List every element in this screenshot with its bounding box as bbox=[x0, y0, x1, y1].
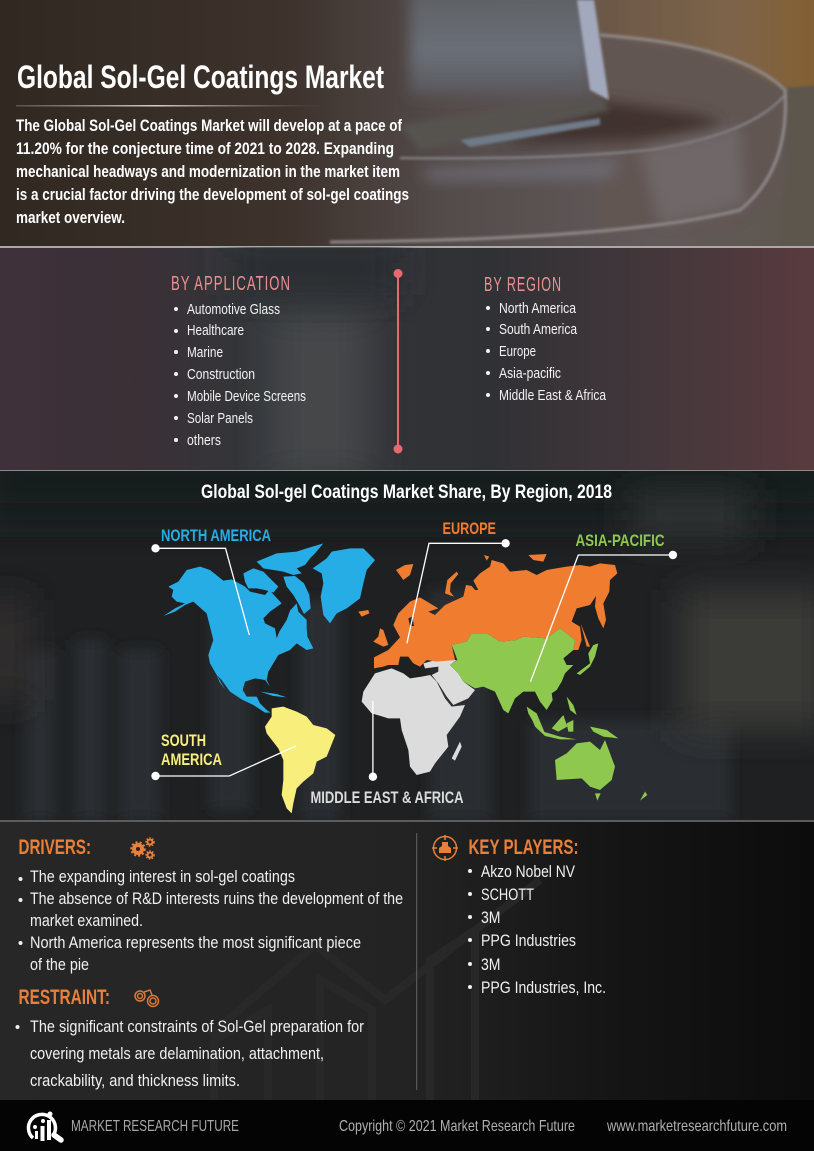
text block: intro paragraph: mechanical headways and modernization in the market item bbox=[16, 162, 400, 181]
list: key players: Akzo Nobel NV bbox=[481, 862, 576, 881]
list: key players: 3M bbox=[481, 955, 500, 974]
label: south america: AMERICA bbox=[161, 750, 222, 769]
list: applications: Healthcare bbox=[187, 322, 244, 339]
icon: key players target bbox=[432, 835, 458, 861]
list: regions: South America bbox=[499, 321, 578, 338]
list: applications: Solar Panels bbox=[187, 410, 253, 427]
text block: intro paragraph: market overview. bbox=[16, 208, 125, 227]
text block: intro paragraph: The Global Sol-Gel Coatings Market will develop at a pace of bbox=[16, 116, 402, 135]
list: key players: 3M bbox=[481, 908, 500, 927]
list: restraint: The significant constraints of Sol-Gel preparation for bbox=[30, 1017, 364, 1036]
panel: header photo background bbox=[0, 0, 814, 250]
label: north america: NORTH AMERICA bbox=[161, 526, 271, 545]
title: Global Sol-Gel Coatings Market bbox=[17, 59, 384, 95]
list: restraint bbox=[16, 1017, 364, 1090]
heading: by application: BY APPLICATION bbox=[171, 273, 291, 295]
list: regions: Asia-pacific bbox=[499, 365, 561, 382]
list: drivers: North America represents the most significant piece bbox=[30, 933, 361, 952]
list: regions: North America bbox=[499, 300, 577, 317]
region: middle east and africa bbox=[362, 660, 475, 775]
list: drivers bbox=[18, 867, 403, 974]
panel: drivers, restraint and key players bbox=[0, 822, 605, 1100]
list: key players bbox=[468, 862, 606, 997]
icon: market research future logo bbox=[28, 1112, 61, 1141]
label: south america bbox=[161, 731, 222, 769]
list: applications: Marine bbox=[187, 344, 223, 361]
region: south america bbox=[265, 707, 335, 813]
panel: map background bbox=[0, 440, 814, 820]
list: drivers: market examined. bbox=[30, 911, 143, 930]
leader lines and dots bbox=[151, 539, 677, 781]
list: applications: Construction bbox=[187, 366, 255, 383]
list: drivers: of the pie bbox=[30, 955, 89, 974]
region: north america bbox=[163, 543, 375, 713]
icon: handcuffs bbox=[135, 990, 158, 1006]
region: europe and russia bbox=[373, 554, 617, 668]
list: drivers: The absence of R&D interests ruins the development of the bbox=[30, 889, 403, 908]
footer copyright: Copyright © 2021 Market Research Future bbox=[339, 1118, 575, 1135]
label: europe: EUROPE bbox=[442, 519, 496, 538]
list: applications: Mobile Device Screens bbox=[187, 388, 306, 405]
label: middle east and africa: MIDDLE EAST & AFRICA bbox=[310, 788, 464, 807]
text block: intro paragraph bbox=[16, 116, 409, 227]
divider with end dots bbox=[394, 269, 402, 454]
regions: americas bbox=[163, 543, 375, 813]
region: asia-pacific bbox=[450, 628, 647, 801]
heading: drivers: DRIVERS: bbox=[18, 836, 91, 859]
text block: intro paragraph: 11.20% for the conjecture time of 2021 to 2028. Expanding bbox=[16, 139, 394, 158]
chart title: Global Sol-gel Coatings Market Share, By Region, 2018 bbox=[201, 482, 612, 503]
label: south america: SOUTH bbox=[161, 731, 206, 750]
panel: segmentation bbox=[0, 240, 814, 480]
list: restraint: crackability, and thickness limits. bbox=[30, 1071, 240, 1090]
panel: footer bbox=[0, 1100, 814, 1151]
list: key players: PPG Industries bbox=[481, 931, 576, 950]
text block: intro paragraph: is a crucial factor driving the development of sol-gel coatings bbox=[16, 185, 409, 204]
list: regions: Middle East & Africa bbox=[499, 387, 607, 404]
list: applications bbox=[174, 301, 306, 449]
heading: by region: BY REGION bbox=[484, 274, 562, 296]
list: applications: Automotive Glass bbox=[187, 301, 280, 318]
iceland bbox=[358, 610, 369, 617]
list: key players: PPG Industries, Inc. bbox=[481, 978, 606, 997]
label: asia-pacific: ASIA-PACIFIC bbox=[576, 531, 664, 550]
world map bbox=[151, 539, 677, 813]
regions: old world bbox=[358, 554, 647, 801]
heading: key players: KEY PLAYERS: bbox=[468, 836, 578, 859]
footer brand name: MARKET RESEARCH FUTURE bbox=[71, 1118, 239, 1135]
list: regions: Europe bbox=[499, 343, 536, 360]
list: key players: SCHOTT bbox=[481, 885, 534, 904]
heading: restraint: RESTRAINT: bbox=[18, 986, 110, 1009]
list: regions bbox=[486, 300, 607, 404]
list: drivers: The expanding interest in sol-gel coatings bbox=[30, 867, 295, 886]
icon: gears bbox=[132, 838, 154, 859]
list: restraint: covering metals are delamination, attachment, bbox=[30, 1044, 324, 1063]
list: applications: others bbox=[187, 432, 221, 449]
